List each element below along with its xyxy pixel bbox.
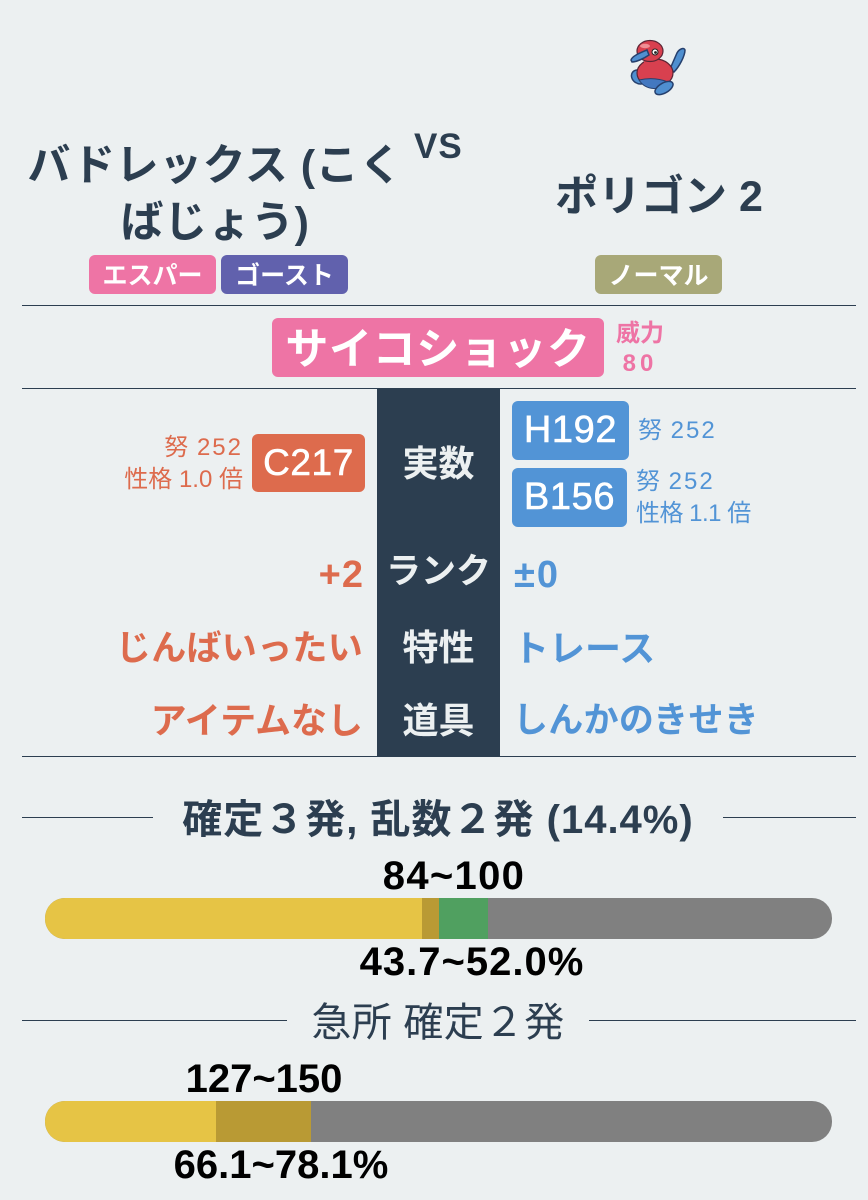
attacker rank: +2 <box>319 554 364 596</box>
heading: critical hit result: 急所 確定２発 <box>311 1001 565 1045</box>
defender H stat <box>512 401 629 460</box>
icon: porygon2 sprite <box>630 40 686 96</box>
label: ability: 特性 <box>402 627 474 668</box>
tag: psychic type: エスパー <box>102 262 202 290</box>
defender item: しんかのきせき <box>513 701 759 740</box>
defender B EV note <box>636 468 751 527</box>
move power: 80 <box>623 350 657 377</box>
defender B EV note: 性格 1.1 倍 <box>636 500 751 527</box>
attacker EV note: 性格 1.0 倍 <box>124 466 243 493</box>
tag: ghost type <box>221 255 348 294</box>
heading: defender name: ポリゴン 2 <box>555 173 763 221</box>
attacker ability: じんばいったい <box>116 629 363 668</box>
defender H stat: H192 <box>524 409 617 451</box>
move power: 威力 <box>616 320 664 347</box>
attacker EV note <box>124 434 243 493</box>
heading: normal hit result: 確定３発, 乱数２発 (14.4%) <box>182 798 694 842</box>
label: rank: ランク <box>386 552 491 591</box>
defender ability: トレース <box>513 628 655 669</box>
defender B stat <box>512 468 627 527</box>
attacker C stat: C217 <box>263 442 354 483</box>
move name: サイコショック <box>285 326 591 374</box>
heading: VS: VS <box>414 127 463 166</box>
attacker item: アイテムなし <box>151 700 363 741</box>
tag: ghost type: ゴースト <box>235 262 334 290</box>
heading: attacker name: バドレックス (こく <box>27 142 403 190</box>
heading: attacker name: ばじょう) <box>121 199 309 247</box>
move power <box>616 320 664 377</box>
chart: critical hit HP bar <box>45 1101 832 1142</box>
label: damage range: 84~100 <box>383 854 525 898</box>
defender B stat: B156 <box>524 476 615 518</box>
chart: normal hit HP bar <box>45 898 832 939</box>
label: damage percent: 43.7~52.0% <box>360 940 584 984</box>
defender B EV note: 努 252 <box>636 468 715 495</box>
tag: psychic type <box>89 255 216 294</box>
label: critical damage range: 127~150 <box>186 1057 342 1101</box>
tag: normal type <box>595 255 722 294</box>
label: critical damage percent: 66.1~78.1% <box>174 1143 388 1187</box>
defender rank: ±0 <box>514 554 560 596</box>
heading: attacker name <box>27 142 403 247</box>
panel: stats table center column <box>377 389 500 757</box>
label: item: 道具 <box>402 700 474 741</box>
tag: normal type: ノーマル <box>608 262 708 290</box>
attacker C stat <box>252 434 365 492</box>
attacker EV note: 努 252 <box>164 434 243 461</box>
defender H EV note: 努 252 <box>638 417 717 444</box>
label: stat values: 実数 <box>402 443 474 484</box>
